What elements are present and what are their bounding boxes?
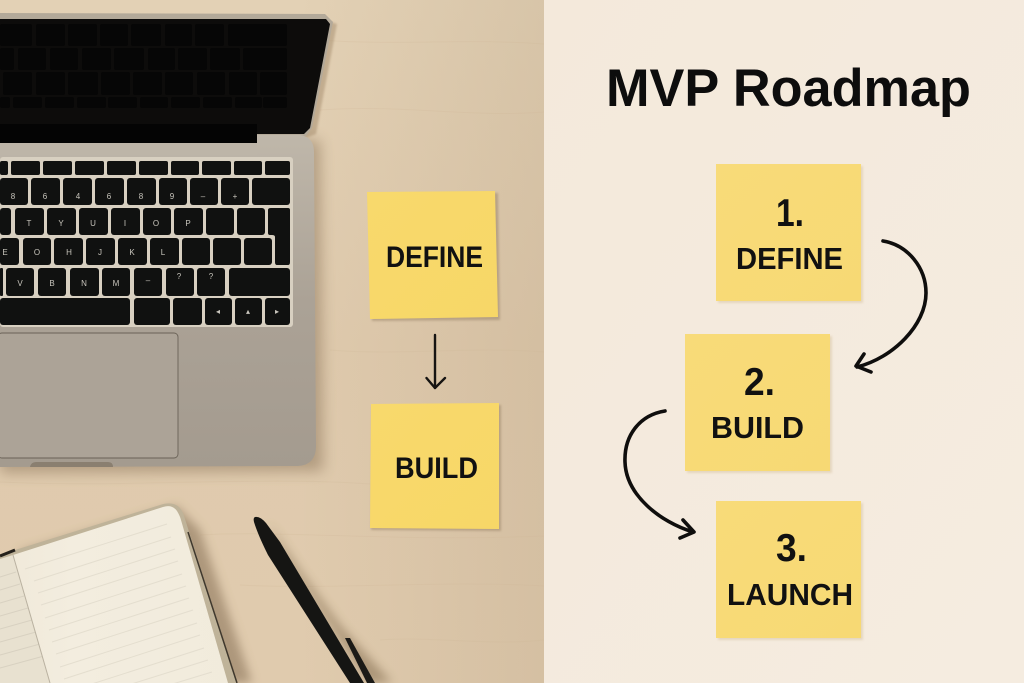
- pen shadow: [268, 522, 392, 683]
- key legends: 6: [43, 192, 48, 201]
- key legends: N: [81, 279, 87, 288]
- laptop base: [0, 135, 316, 467]
- key legends: Y: [58, 219, 64, 228]
- key legends: ?: [177, 272, 182, 281]
- arrow: step 2 to step 3: [625, 411, 694, 538]
- step 3 note: launch: [716, 501, 863, 640]
- key legends: –: [146, 276, 151, 285]
- key legends: E: [2, 248, 8, 257]
- lid shadow: [300, 20, 337, 140]
- key legends: M: [113, 279, 120, 288]
- panel: roadmap: [544, 0, 1024, 683]
- key legends: ▸: [275, 307, 279, 316]
- key legends: T: [27, 219, 32, 228]
- arrow: define to build (desk): [426, 335, 445, 388]
- laptop shadow: [0, 140, 323, 473]
- key legends: +: [233, 192, 238, 201]
- key legends: [2, 192, 279, 316]
- pen clip: [345, 638, 375, 683]
- key legends: O: [34, 248, 40, 257]
- key legends: 6: [107, 192, 112, 201]
- key legends: K: [129, 248, 135, 257]
- key legends: L: [161, 248, 166, 257]
- sticky note: build (desk): BUILD: [395, 452, 478, 485]
- sticky note: define (desk): [367, 191, 500, 321]
- trackpad: [0, 333, 178, 458]
- step 1 note: define: DEFINE: [736, 241, 843, 276]
- key legends: U: [90, 219, 96, 228]
- step 3 note: launch: LAUNCH: [727, 577, 853, 612]
- title: MVP Roadmap: [606, 59, 971, 118]
- sticky note: define (desk): DEFINE: [386, 241, 483, 274]
- key legends: I: [124, 219, 126, 228]
- arrow: step 1 to step 2: [856, 241, 926, 372]
- step 1 note: define: [716, 164, 863, 303]
- left page: [0, 555, 50, 683]
- notebook shadow: [0, 506, 252, 683]
- pen body: [254, 517, 364, 683]
- notebook cover: [0, 503, 237, 683]
- sticky note: build (desk): [370, 403, 501, 531]
- key legends: 8: [139, 192, 144, 201]
- notebook: [0, 500, 252, 683]
- step 2 note: build: BUILD: [711, 410, 804, 445]
- laptop lid screen: [0, 13, 333, 143]
- key legends: ?: [209, 272, 214, 281]
- key legends: 9: [170, 192, 175, 201]
- key legends: O: [153, 219, 159, 228]
- key legends: 8: [11, 192, 16, 201]
- key legends: –: [201, 192, 206, 201]
- key legends: 4: [76, 192, 81, 201]
- key legends: H: [66, 248, 72, 257]
- pen: [254, 517, 392, 683]
- step 2 note: build: 2.: [744, 361, 775, 404]
- key legends: ◂: [216, 307, 220, 316]
- right page with ruled lines: [14, 506, 228, 683]
- step 2 note: build: [685, 334, 832, 473]
- keyboard: [0, 161, 290, 325]
- key legends: V: [17, 279, 23, 288]
- key legends: J: [98, 248, 102, 257]
- step 1 note: define: 1.: [776, 192, 804, 235]
- step 3 note: launch: 3.: [776, 527, 807, 570]
- laptop: [0, 13, 337, 473]
- key legends: ▴: [246, 307, 250, 316]
- front notch: [30, 462, 113, 467]
- key legends: B: [49, 279, 55, 288]
- key legends: P: [185, 219, 191, 228]
